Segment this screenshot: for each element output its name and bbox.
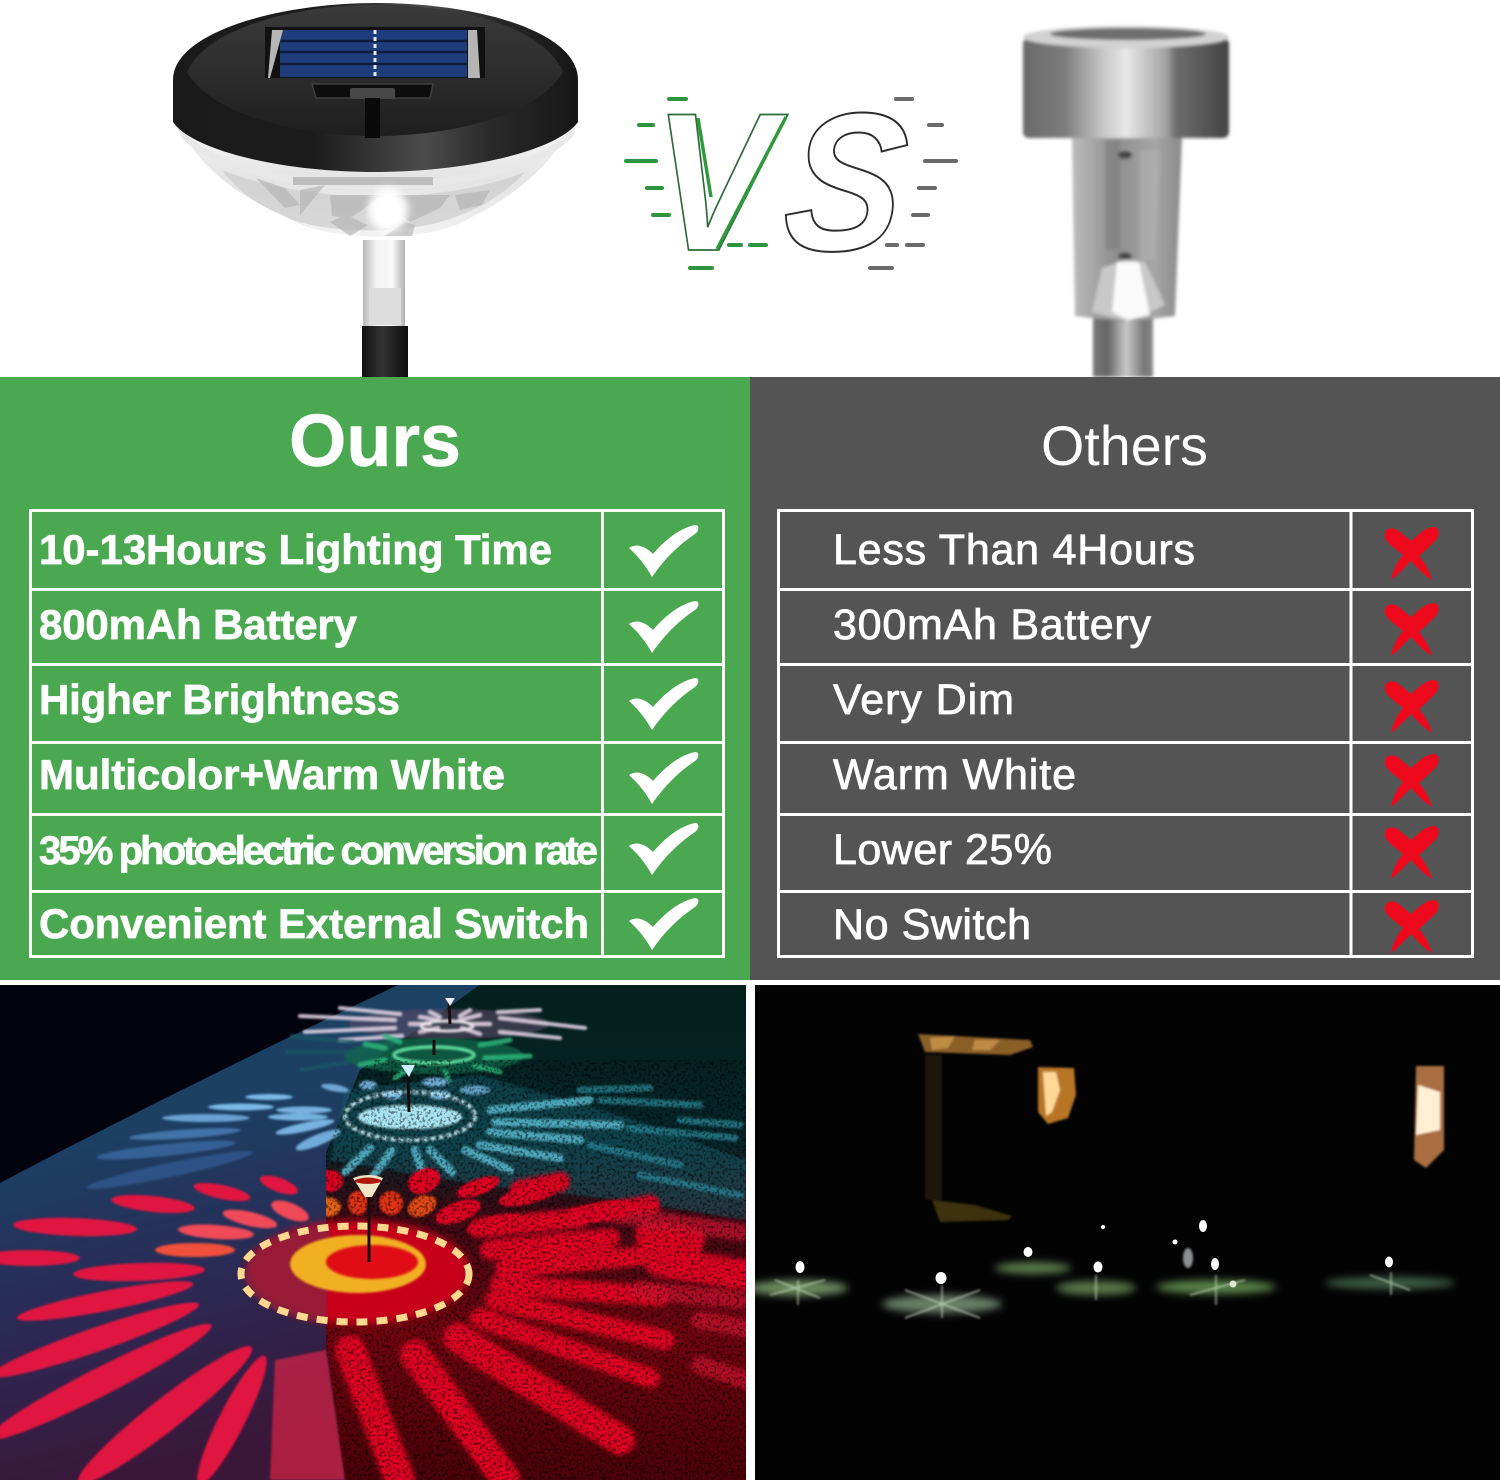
photo: others lights dim at night: [748, 985, 1500, 1480]
VS emblem: [626, 71, 956, 292]
letter S: S: [776, 71, 917, 292]
panel: others: [750, 377, 1500, 980]
row labels: ours: Convenient External Switch: [39, 900, 589, 947]
icons: red crosses: [1385, 527, 1439, 953]
row labels: others: Lower 25%: [833, 826, 1052, 874]
ground light glows: [748, 1262, 1455, 1313]
row labels: others: No Switch: [833, 901, 1031, 949]
house and lit windows: [918, 1034, 1444, 1222]
red lamp projection rings: [241, 1220, 470, 1324]
red petals on pavement: [0, 1172, 345, 1480]
green light pattern: [285, 1036, 530, 1082]
blue light pattern: [85, 1075, 746, 1220]
heading: others: Others: [1041, 414, 1208, 477]
row labels: ours: Higher Brightness: [39, 676, 400, 723]
row labels: ours: 10-13Hours Lighting Time: [39, 526, 552, 573]
icons: check marks: [629, 525, 698, 950]
letter V: V: [653, 72, 789, 292]
row labels: ours: [39, 526, 598, 947]
row labels: others: Warm White: [833, 751, 1076, 799]
product photo: others solar light: [1023, 26, 1229, 377]
bright lamp heads: [796, 1220, 1393, 1288]
heading: ours: Ours: [289, 399, 461, 482]
white light pattern: [300, 1008, 585, 1040]
row labels: others: [833, 526, 1195, 949]
photo: ours lights projecting colorful patterns at night: [0, 985, 746, 1480]
row labels: ours: 800mAh Battery: [39, 601, 358, 648]
red light pattern on grass: [311, 1163, 746, 1480]
row labels: others: Less Than 4Hours: [833, 526, 1195, 574]
table: others grid: [778, 510, 1473, 957]
product photo: ours solar light: [173, 3, 578, 377]
row labels: ours: Multicolor+Warm White: [39, 751, 505, 798]
row labels: others: 300mAh Battery: [833, 601, 1152, 649]
speed dashes: [626, 99, 956, 268]
lamp posts: [353, 998, 455, 1262]
panel: ours: [0, 377, 750, 980]
row labels: ours: 35% photoelectric conversion rate: [39, 829, 598, 873]
table: ours grid: [30, 510, 724, 957]
grass speckle texture: [326, 1060, 746, 1480]
row labels: others: Very Dim: [833, 676, 1014, 724]
